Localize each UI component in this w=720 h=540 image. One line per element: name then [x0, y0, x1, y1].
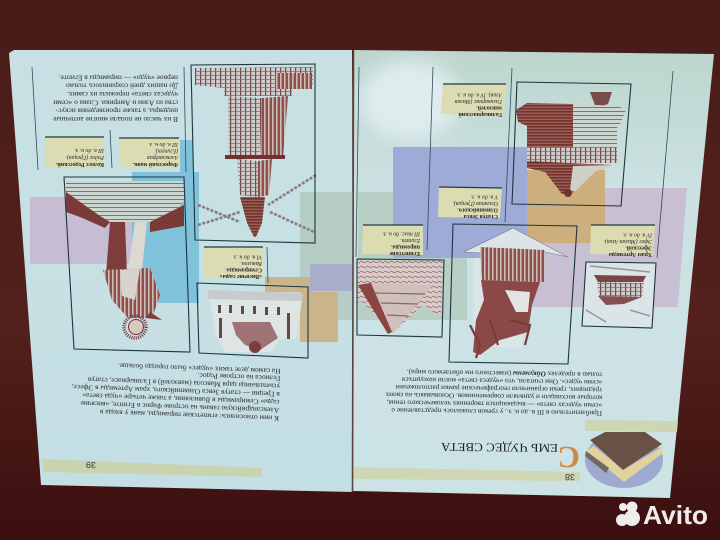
caption: Temple of Artemis: Эфес (Малая Азия).	[604, 238, 652, 245]
text block: introduction	[385, 367, 603, 417]
illustration: Colossus of Rhodes	[66, 181, 184, 338]
caption: Hanging Gardens: «Висячие сады»	[220, 273, 262, 279]
text block: list of wonders: Гелиоса на острове Родос.	[197, 371, 280, 383]
highlight on glossy paper	[360, 60, 460, 140]
spine shadow	[352, 50, 354, 492]
colour block: tan	[265, 277, 338, 342]
frame: Hanging Gardens	[197, 283, 308, 358]
divider lines	[32, 67, 268, 283]
illustration: Temple of Artemis	[582, 262, 656, 327]
divider lines	[356, 67, 673, 258]
illustration: Hanging Gardens	[208, 290, 303, 353]
illustration: Statue of Zeus	[464, 228, 568, 358]
heading	[441, 440, 580, 475]
caption: Temple of Artemis: Храм Артемиды	[608, 251, 652, 257]
text block: introduction: которые восхищали и удивляли современников. Основываясь на своих	[385, 391, 602, 402]
caption: Egyptian pyramids: Египетские	[389, 250, 420, 256]
frame: lighthouse	[191, 64, 315, 243]
illustration: Egyptian pyramids	[357, 260, 443, 334]
icon: Avito dots	[616, 502, 640, 526]
caption: Colossus of Rhodes: III в. до н. э.	[74, 147, 105, 154]
caption: Egyptian pyramids: пирамиды.	[390, 244, 420, 250]
panel: left magazine page 39	[9, 50, 353, 492]
frame: Mausoleum	[512, 82, 631, 206]
frame: Egyptian pyramids	[357, 259, 444, 337]
frame: Statue of Zeus	[449, 224, 577, 364]
caption: Hanging Gardens	[204, 247, 263, 279]
colour block: periwinkle	[310, 264, 353, 291]
text block: continued paragraph: ства из Азии и Америки. Слава о «семи	[53, 98, 178, 107]
text block: continued paragraph: В их число не попали многие античные	[53, 115, 178, 124]
caption: Temple of Artemis: IV в. до н. э.	[623, 232, 653, 238]
caption: Colossus of Rhodes: Родос (Греция).	[66, 154, 105, 161]
caption: Mausoleum: мавзолей.	[476, 104, 502, 112]
illustration: Pharos lighthouse	[195, 67, 316, 237]
colour block: blue	[132, 140, 199, 303]
caption: Pharos lighthouse	[119, 138, 179, 168]
caption: Pharos lighthouse: (Египет).	[154, 148, 178, 154]
text block: continued paragraph: шедевры, а также произведения искус-	[55, 107, 178, 116]
icon: heading emblem	[585, 432, 663, 488]
caption: Pharos lighthouse: Александрия	[147, 154, 179, 161]
illustration: Mausoleum	[516, 92, 626, 197]
caption: Statue of Zeus: Олимпийского.	[457, 206, 498, 214]
colour block: purple	[30, 197, 132, 264]
frame: Colossus	[64, 177, 190, 352]
text block: introduction: традициях, греки ограничили географические рамки расположения	[395, 383, 602, 394]
text block: list of wonders: сады» Семирамиды в Вавилонии, а также четыре «чуда света»	[82, 391, 280, 407]
caption: Hanging Gardens: Вавилон.	[240, 260, 262, 266]
text block: continued paragraph: До наших дней сохранилось только	[66, 82, 178, 91]
caption: Hanging Gardens: VI в. до н. э.	[233, 254, 262, 260]
caption: Mausoleum: Галикарнасский	[458, 111, 502, 118]
colour block: tan	[527, 170, 605, 243]
text block: list of wonders: На самом деле таких «чудес» было гораздо больше.	[117, 361, 281, 376]
caption: Statue of Zeus: V в. до н. э.	[471, 194, 498, 200]
caption: Mausoleum: Азия). IV в. до н. э.	[456, 92, 503, 98]
caption: Statue of Zeus: Статуя Зевса	[464, 213, 498, 219]
wordmark: Avito	[643, 500, 708, 530]
page number 39: 39	[86, 460, 96, 470]
watermark: Avito	[616, 500, 708, 530]
caption: Pharos lighthouse: III в. до н. э.	[148, 141, 179, 148]
text block: introduction: «семи чудес». Они считали, что «чудеса света» могли находиться	[401, 375, 602, 386]
caption: Temple of Artemis: Эфесской.	[625, 244, 652, 252]
colour block: periwinkle	[393, 147, 527, 258]
text block: continued paragraph	[53, 73, 178, 124]
text block: list of wonders	[70, 360, 281, 423]
colour block: purple	[527, 188, 687, 307]
panel: right magazine page 38	[353, 50, 714, 498]
text block: introduction: Приблизительно в III в. до н. э., у греков сложилось представление о	[391, 406, 602, 417]
text block: list of wonders: Александрийскую гавань на острове Фарос в Египте, «висячие	[80, 399, 279, 415]
caption: Mausoleum: Галикарнас (Малая	[454, 98, 503, 105]
caption: Statue of Zeus: Олимпия (Греция).	[452, 200, 498, 207]
caption: Mausoleum	[441, 84, 506, 118]
caption: Egyptian pyramids	[362, 225, 423, 256]
text block: introduction: только в пределах Ойкумены (известного им обитаемого мира).	[407, 368, 603, 379]
olive bar above heading	[585, 420, 678, 432]
frame: Temple of Artemis	[582, 262, 656, 328]
page number 38: 38	[565, 472, 575, 482]
text block: introduction: «семи чудесах света» — выдающихся творениях человеческого гения,	[386, 398, 602, 409]
caption: Egyptian pyramids: Египет.	[400, 237, 421, 243]
caption: Statue of Zeus	[438, 187, 502, 219]
text block: continued paragraph: первое «чудо» — пирамиды в Египте.	[58, 73, 178, 82]
caption: Temple of Artemis	[590, 225, 655, 257]
caption: Hanging Gardens: Семирамиды.	[225, 266, 262, 272]
text block: list of wonders: в Греции — статуя Зевса Олимпийского, храм Артемиды в Эфесе,	[71, 383, 280, 399]
caption: Colossus of Rhodes: Колосс Родосский.	[55, 161, 104, 168]
caption: Pharos lighthouse: Фаросский маяк.	[132, 161, 178, 168]
footer bar right	[353, 467, 580, 481]
text block: continued paragraph: чудесах света» пережила их самих.	[67, 90, 178, 99]
text block: list of wonders: К ним относились: египетские пирамиды, маяк у входа в	[99, 408, 279, 423]
text block: list of wonders: усыпальница царя Мавсола (мавзолей) в Галикарнасе, статуя	[87, 375, 280, 391]
colour block: grey-green	[358, 192, 467, 320]
caption: Colossus of Rhodes	[45, 137, 105, 168]
drop cap: С	[557, 440, 580, 475]
caption: Egyptian pyramids: III тыс. до н. э.	[382, 230, 421, 238]
heading text: ЕМЬ ЧУДЕС СВЕТА	[441, 440, 558, 455]
colour block: grey-green	[300, 192, 353, 320]
footer bar left	[42, 459, 262, 477]
